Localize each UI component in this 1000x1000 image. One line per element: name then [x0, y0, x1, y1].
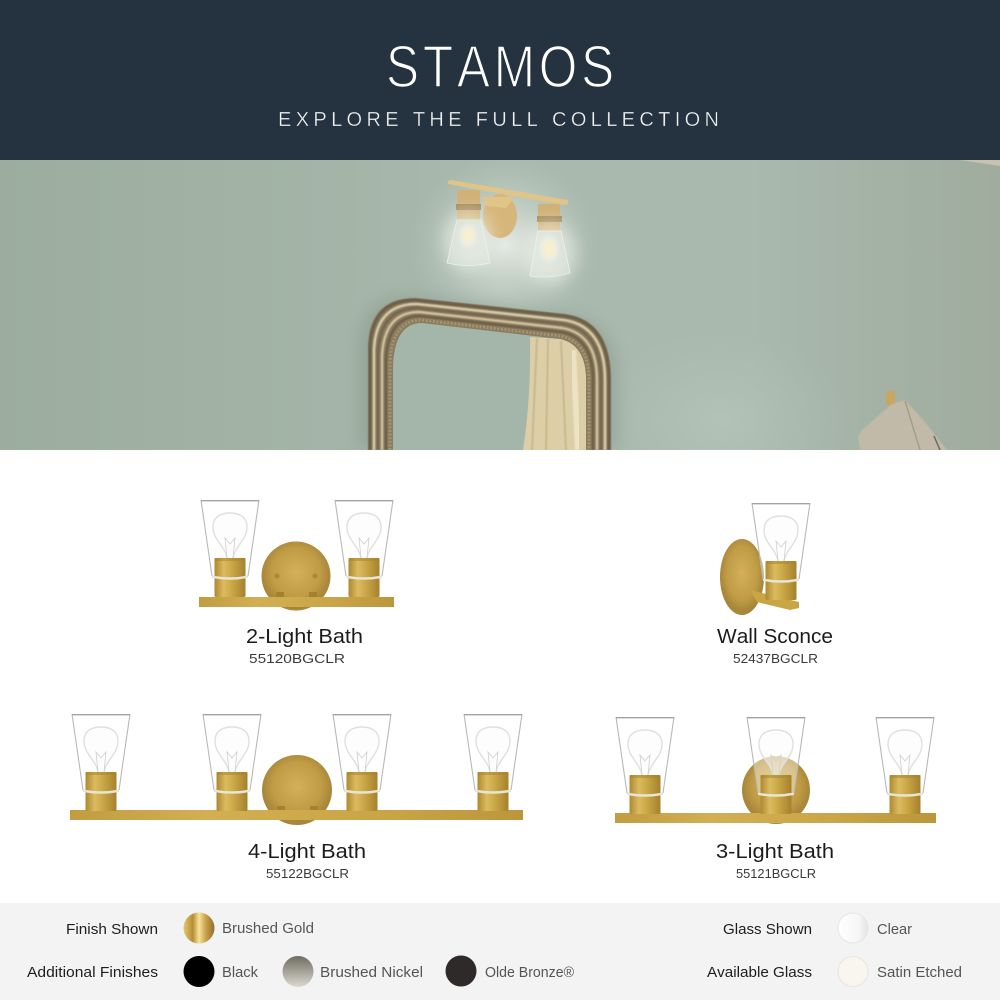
- additional finishes: Additional Finishes: [27, 964, 158, 981]
- glass shown: Glass Shown: [723, 921, 812, 938]
- additional finishes: [27, 956, 574, 987]
- product: 2-light bath: [199, 500, 394, 666]
- additional finishes: Olde Bronze®: [485, 964, 574, 981]
- title: STAMOS: [386, 34, 618, 100]
- available glass: Available Glass: [707, 964, 812, 981]
- product: 3-light bath: 3-Light Bath: [716, 841, 834, 863]
- additional finishes: Black: [222, 964, 258, 981]
- additional finishes: Brushed Nickel: [320, 964, 423, 981]
- product: wall sconce: Wall Sconce: [717, 626, 833, 648]
- finish shown: [66, 912, 314, 944]
- product: 3-light bath: [615, 717, 936, 881]
- available glass: Satin Etched: [877, 964, 962, 981]
- curtain in mirror: [523, 337, 586, 450]
- sconce in photo: [444, 180, 576, 285]
- subtitle: EXPLORE THE FULL COLLECTION: [278, 109, 719, 131]
- glass shown: Clear: [877, 921, 912, 938]
- glass shown: [723, 913, 912, 943]
- product: 3-light bath: 55121BGCLR: [736, 866, 816, 881]
- finish shown: Finish Shown: [66, 921, 158, 938]
- product: 2-light bath: 2-Light Bath: [246, 626, 363, 648]
- towel on hook: [858, 391, 947, 450]
- product: 4-light bath: 4-Light Bath: [248, 841, 366, 863]
- product: wall sconce: [717, 503, 833, 666]
- available glass: [707, 956, 962, 986]
- header banner: [0, 0, 1000, 160]
- mirror: [358, 296, 618, 450]
- product: 2-light bath: 55120BGCLR: [249, 651, 345, 666]
- product: 4-light bath: [70, 714, 523, 881]
- finish shown: Brushed Gold: [222, 920, 314, 937]
- product: wall sconce: 52437BGCLR: [733, 651, 818, 666]
- photo: bathroom wall with mirror and sconce: [0, 160, 1000, 450]
- product: 4-light bath: 55122BGCLR: [266, 866, 349, 881]
- legend: finishes and glass: [0, 903, 1000, 1000]
